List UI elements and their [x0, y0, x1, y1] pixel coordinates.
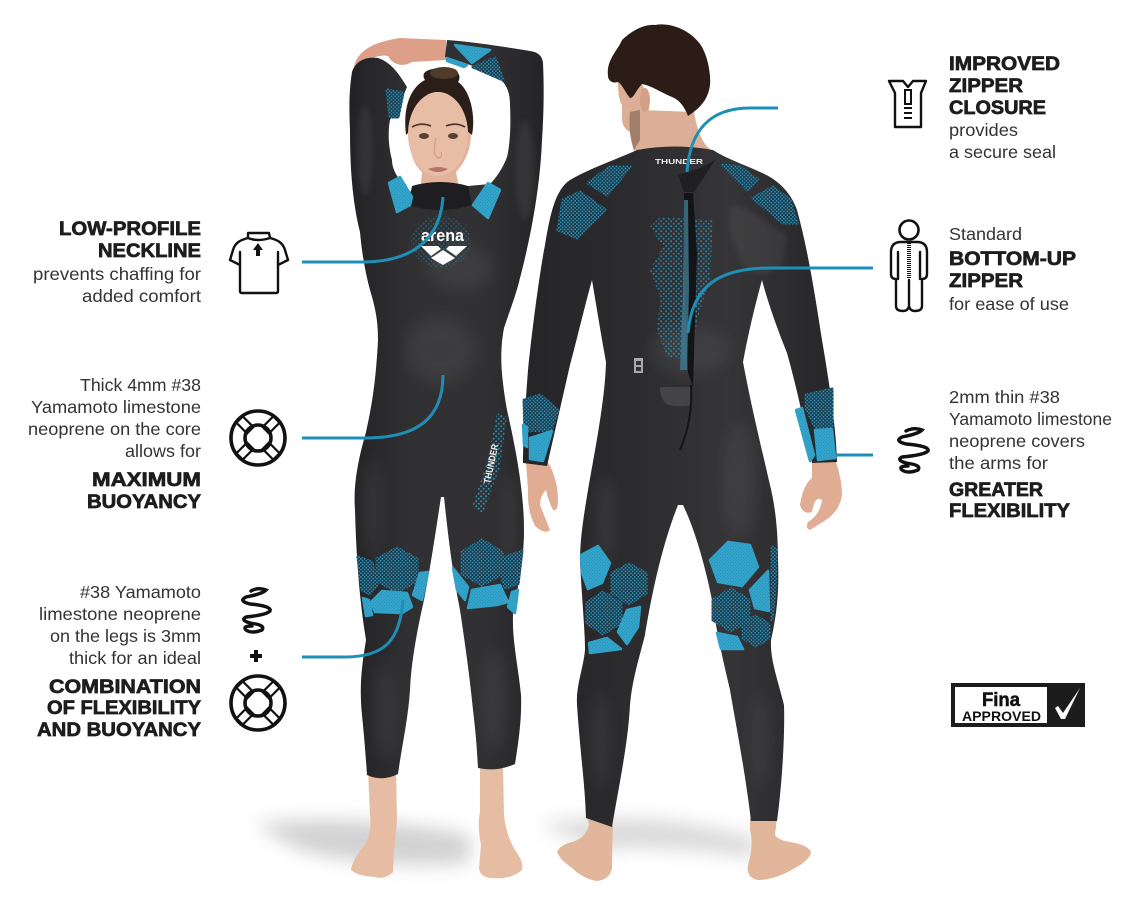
heading: MAXIMUM — [92, 470, 201, 491]
heading — [949, 480, 1070, 522]
woman suit sheen — [357, 105, 534, 760]
description: provides — [949, 120, 1018, 140]
heading: GREATER — [949, 480, 1043, 501]
icon: t-shirt — [230, 233, 288, 293]
woman hair — [405, 68, 473, 135]
arena logo: arena — [421, 226, 465, 245]
description: Standard — [949, 224, 1022, 244]
man feet — [557, 815, 811, 881]
woman face detail — [408, 92, 468, 176]
man shoulder patches — [558, 165, 797, 238]
description: Yamamoto limestone — [949, 409, 1112, 429]
description: allows for — [125, 441, 201, 461]
description: on the legs is 3mm — [50, 626, 201, 646]
heading — [87, 470, 201, 513]
panel: bottom-up zipper — [891, 220, 1076, 314]
man knee hexagons — [581, 542, 776, 653]
man back dot field — [650, 217, 713, 360]
heading: LOW-PROFILE — [59, 219, 201, 240]
heading: FLEXIBILITY — [949, 501, 1070, 522]
description — [949, 387, 1112, 473]
heading — [59, 219, 201, 262]
figure: woman front view — [349, 38, 544, 878]
panel: maximum buoyancy — [28, 375, 285, 513]
woman thigh graphic — [472, 413, 507, 513]
description: #38 Yamamoto — [80, 582, 201, 602]
badge: fina approved: APPROVED — [962, 708, 1041, 724]
heading: AND BUOYANCY — [37, 720, 201, 741]
woman hand — [354, 38, 446, 70]
heading — [37, 677, 201, 741]
woman wetsuit — [349, 40, 544, 778]
badge: fina approved — [951, 683, 1085, 727]
heading: CLOSURE — [949, 98, 1046, 119]
man hair — [608, 24, 710, 116]
figure: man back view — [523, 24, 842, 881]
woman knee hexagons — [358, 540, 522, 616]
icon: plus — [250, 650, 262, 662]
arena logo — [411, 216, 471, 268]
panel: combination of flexibility and buoyancy — [37, 582, 285, 741]
description — [33, 264, 201, 306]
panel: low-profile neckline — [33, 219, 288, 306]
description: the arms for — [949, 453, 1048, 473]
heading: IMPROVED — [949, 54, 1060, 75]
icon: spring — [899, 429, 928, 472]
icon: life ring — [231, 676, 285, 730]
callout lines — [302, 108, 873, 657]
heading — [949, 54, 1060, 119]
panel: improved zipper closure — [889, 54, 1060, 162]
description: neoprene covers — [949, 431, 1085, 451]
icon: life ring — [231, 411, 285, 465]
icon: zipper — [889, 81, 926, 127]
description: Thick 4mm #38 — [80, 375, 201, 395]
man suit sheen — [591, 205, 787, 790]
icon: spring — [243, 589, 270, 632]
heading: ZIPPER — [949, 76, 1023, 97]
description: added comfort — [82, 286, 201, 306]
man thunder neck label: THUNDER — [655, 157, 704, 166]
floor shadows — [255, 818, 755, 865]
man back zip panel — [660, 160, 715, 450]
description: Yamamoto limestone — [31, 397, 201, 417]
woman sleeve patches — [387, 45, 503, 218]
description: neoprene on the core — [28, 419, 201, 439]
man size tag — [634, 358, 643, 373]
man stubble — [630, 110, 640, 150]
heading: COMBINATION — [49, 677, 201, 698]
panel: greater flexibility — [899, 387, 1112, 522]
description: prevents chaffing for — [33, 264, 201, 284]
icon: person with zipper — [891, 220, 927, 311]
description: 2mm thin #38 — [949, 387, 1060, 407]
description — [28, 375, 201, 461]
man face side — [618, 80, 650, 152]
heading: BUOYANCY — [87, 492, 201, 513]
description: thick for an ideal — [69, 648, 201, 668]
heading: NECKLINE — [98, 241, 201, 262]
woman collar — [408, 182, 472, 210]
man neck — [636, 110, 714, 152]
man ear — [640, 88, 650, 112]
description — [949, 120, 1056, 162]
man hands — [526, 462, 842, 532]
heading: ZIPPER — [949, 271, 1023, 292]
heading: OF FLEXIBILITY — [47, 698, 201, 719]
description: for ease of use — [949, 294, 1069, 314]
heading: BOTTOM-UP — [949, 249, 1076, 270]
woman thigh graphic: THUNDER — [482, 443, 501, 485]
description: limestone neoprene — [39, 604, 201, 624]
woman neck and face — [411, 130, 471, 192]
heading — [949, 249, 1076, 292]
description — [39, 582, 201, 668]
description: a secure seal — [949, 142, 1056, 162]
man wetsuit — [523, 146, 837, 827]
man forearm patches — [523, 389, 835, 461]
woman feet — [351, 765, 522, 878]
badge: fina approved: Fina — [982, 690, 1020, 711]
